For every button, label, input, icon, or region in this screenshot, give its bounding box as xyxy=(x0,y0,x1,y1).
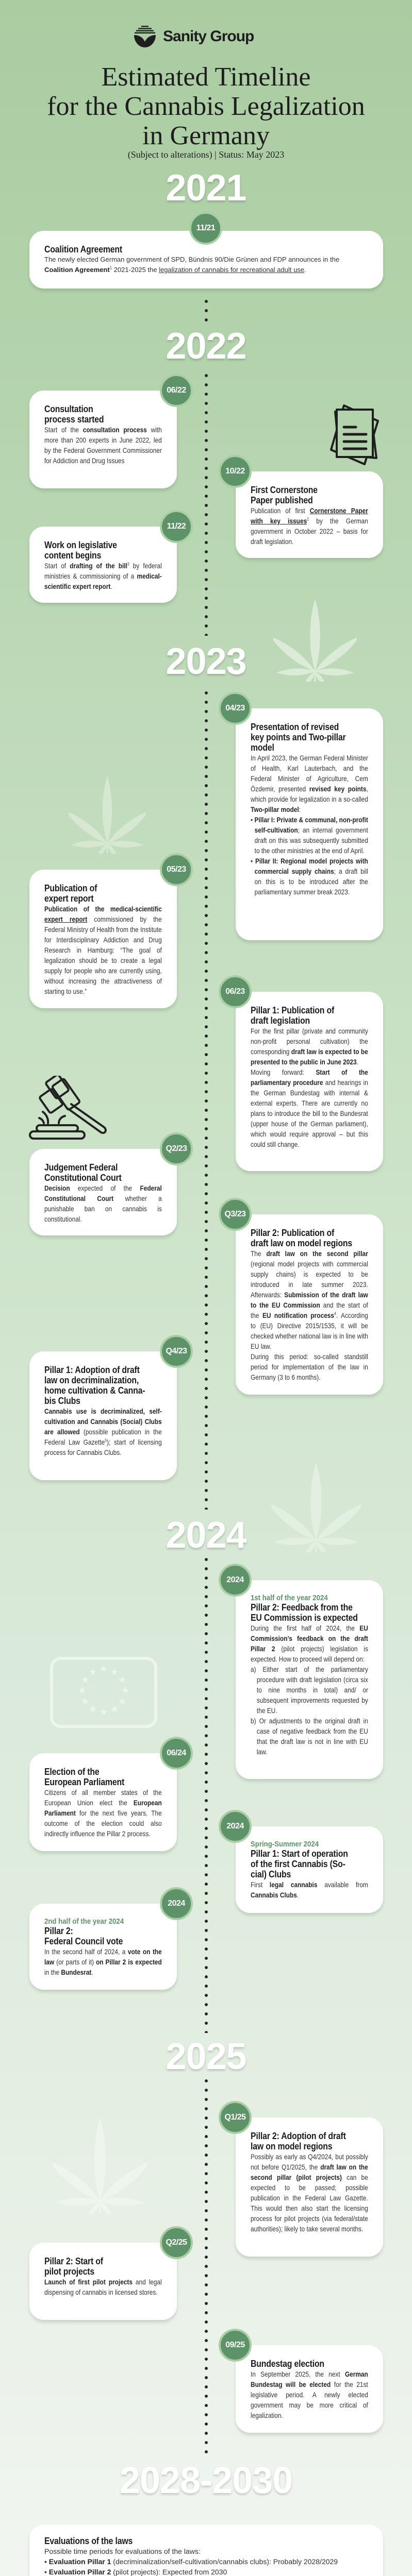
date: 05/23 xyxy=(160,853,193,886)
date: 2024 (1st half): 2024 xyxy=(226,1575,244,1584)
card: EU commission feedback: a) Either start of the parliamentary procedure with draft legislation (circa six to nine months in total) and/ or subsequent improvements requested by the EU. xyxy=(251,1665,368,1715)
card: pilot projects start: Launch of first pilot projects and legal dispensing of cannabis in licensed stores. xyxy=(44,2278,162,2296)
card: coalition agreement: The newly elected German government of SPD, Bündnis 90/Die Grünen and FDP announces in the Coalition Agreement1 2021-2025 the legalization of cannabis for recreational adult use. xyxy=(44,256,339,274)
date: 11/21: 11/21 xyxy=(196,224,215,232)
card: first cannabis clubs: First legal cannabis available from Cannabis Clubs. xyxy=(251,1880,368,1899)
card: pillar 1 adoption: Pillar 1: Adoption of draft xyxy=(44,1365,140,1375)
card: consultation process: process started xyxy=(44,414,104,425)
date: 2024 (spring-summer) xyxy=(219,1810,252,1843)
title xyxy=(47,62,365,150)
date: 09/25 xyxy=(219,2329,252,2362)
title: for the Cannabis Legalization xyxy=(47,92,365,121)
year: 2024: 2024 xyxy=(166,1515,246,1556)
year: 2028-2030: 2028-2030 xyxy=(120,2460,292,2501)
date: 06/23: 06/23 xyxy=(225,987,245,996)
date: 2024 (2nd half): 2024 xyxy=(168,1899,185,1908)
card: first cannabis clubs: Pillar 1: Start of operation xyxy=(251,1849,348,1859)
date: 10/22 xyxy=(219,455,252,488)
card: pilot projects start: pilot projects xyxy=(44,2266,94,2277)
card: pillar 2 model regions draft: The draft law on the second pillar (regional model projects with commercial supply chains) is expected to be introduced in late summer 2023. Afterwards: Submission of the draft law to the EU Commission and the start of the EU notification process4. According to (EU) Directive 2015/1535, it will be checked whether national law is in line with EU law. xyxy=(251,1249,368,1350)
date: Q2/25 xyxy=(160,2226,193,2259)
card: revised key points: key points and Two-pillar xyxy=(251,732,346,742)
card: evaluations xyxy=(29,2524,383,2576)
card: first cannabis clubs xyxy=(236,1826,383,1913)
date: Q2/25: Q2/25 xyxy=(166,2238,187,2247)
icon: EU flag: ★ xyxy=(89,1667,97,1677)
subtitle: (Subject to alterations) | Status: May 2023 xyxy=(128,149,284,160)
card: evaluations: • Evaluation Pillar 1 (decriminalization/self-cultivation/cannabis clubs): Probably 2028/2029 xyxy=(44,2557,338,2566)
date: 06/22: 06/22 xyxy=(167,386,186,395)
card: pillar 1 adoption: law on decriminalization, xyxy=(44,1375,139,1385)
card: revised key points: In April 2023, the German Federal Minister of Health, Karl Lauterbach, and the Federal Minister of Agriculture, Cem Özdemir, presented revised key points, which provide for legalization in a so-called Two-pillar model: xyxy=(251,754,368,814)
card: first cannabis clubs: Spring-Summer 2024 xyxy=(251,1840,319,1849)
card: revised key points xyxy=(236,708,383,940)
card: EU commission feedback: EU Commission is expected xyxy=(251,1613,358,1623)
card: pilot projects start: Pillar 2: Start of xyxy=(44,2256,103,2266)
title: Estimated Timeline xyxy=(102,62,310,92)
card: expert report xyxy=(29,870,177,1008)
icon: EU flag: ★ xyxy=(81,1696,89,1707)
date: 2024 (2nd half) xyxy=(160,1887,193,1920)
icon: cannabis leaf left xyxy=(69,776,146,854)
card: european parliament election: Citizens of all member states of the European Union elect the European Parliament for the next five years. The outcome of the election could also indirectly influence the Pillar 2 process. xyxy=(44,1788,162,1838)
card: federal council vote: In the second half of 2024, a vote on the law (or parts of it) on Pillar 2 is expected in the Bundesrat. xyxy=(44,1947,162,1976)
date: 11/22: 11/22 xyxy=(167,522,186,531)
card: pillar 1 adoption: bis Clubs xyxy=(44,1396,80,1406)
card: pillar 2 model regions draft: During this period: so-called standstill period for implementation of the law in Germany (3 to 6 months). xyxy=(251,1352,368,1381)
card: constitutional court: Constitutional Court xyxy=(44,1173,122,1183)
card: work on legislative content: Work on legislative xyxy=(44,540,117,550)
card: pillar 1 adoption: home cultivation & Canna- xyxy=(44,1385,145,1396)
date: Q3/23: Q3/23 xyxy=(224,1210,246,1218)
card: expert report: Publication of xyxy=(44,883,97,893)
card: first cornerstone paper: First Cornerstone xyxy=(251,485,318,495)
card: bundestag election: In September 2025, the next German Bundestag will be elected for the 21st legislative period. A newly elected government may be more critical of legalization. xyxy=(251,2370,368,2419)
icon: EU flag: ★ xyxy=(110,1704,119,1715)
card: pilot projects start xyxy=(29,2243,177,2320)
year: 2021: 2021 xyxy=(166,167,246,209)
card: federal council vote: Pillar 2: xyxy=(44,1926,73,1936)
date: 05/23: 05/23 xyxy=(167,865,186,874)
card: pillar 1 adoption xyxy=(29,1351,177,1480)
year: 2022: 2022 xyxy=(166,326,246,367)
date: Q1/25 xyxy=(219,2101,252,2134)
icon: gavel xyxy=(29,1076,107,1140)
date: 04/23: 04/23 xyxy=(225,704,245,713)
card: consultation process: Consultation xyxy=(44,404,93,414)
card: work on legislative content xyxy=(29,527,177,603)
card: european parliament election: Election of the xyxy=(44,1767,99,1777)
card: first cornerstone paper: Publication of first Cornerstone Paper with key issues2 by the German government in October 2022 – basis for draft legislation. xyxy=(251,506,368,546)
date: 06/23 xyxy=(219,975,252,1008)
card: pillar 1 draft legislation: Moving forward: Start of the parliamentary procedure and hearings in the German Bundestag with internal & external experts. There are currently no plans to introduce the bill to the Bundesrat (upper house of the German parliament), which would require approval – but this could still change. xyxy=(251,1068,368,1148)
card: revised key points: • Pillar I: Private & communal, non-profit self-cultivation; an internal government draft on this was subsequently submitted to the other ministries at the end of April. xyxy=(251,816,368,855)
card: first cannabis clubs: of the first Cannabis (So- xyxy=(251,1859,345,1869)
icon: cannabis leaf 2024 xyxy=(271,1463,361,1552)
card: pillar 2 adoption: law on model regions xyxy=(251,2141,332,2151)
card: consultation process: Start of the consultation process with more than 200 experts in June 2022, led by the Federal Government Commissioner for Addiction and Drug Issues xyxy=(44,426,162,465)
year: 2025: 2025 xyxy=(166,2036,246,2077)
icon: cannabis leaf 2025 xyxy=(53,2119,147,2191)
icon: EU flag: ★ xyxy=(110,1667,119,1677)
card: pillar 2 model regions draft: draft law on model regions xyxy=(251,1238,352,1248)
card: pillar 1 adoption: Cannabis use is decriminalized, self-cultivation and Cannabis (Social) Clubs are allowed (possible publication in the Federal Law Gazette5); start of licensing process for Cannabis Clubs. xyxy=(44,1407,162,1456)
date: 09/25: 09/25 xyxy=(225,2341,245,2349)
card: coalition agreement: Coalition Agreement xyxy=(44,244,122,255)
card: first cannabis clubs: cial) Clubs xyxy=(251,1869,291,1879)
card: pillar 2 model regions draft: Pillar 2: Publication of xyxy=(251,1228,334,1238)
icon: EU flag: ★ xyxy=(89,1704,97,1715)
icon: EU flag: ★ xyxy=(78,1685,86,1696)
card: evaluations: Evaluations of the laws xyxy=(44,2536,133,2546)
card: consultation process xyxy=(29,391,177,488)
card: coalition agreement xyxy=(29,231,383,289)
header logo xyxy=(134,26,254,47)
card: european parliament election xyxy=(29,1753,177,1851)
card: pillar 1 draft legislation: draft legislation xyxy=(251,1015,310,1026)
card: work on legislative content: content begins xyxy=(44,550,101,561)
card: bundestag election xyxy=(236,2345,383,2433)
icon: documents xyxy=(330,404,379,465)
card: revised key points: • Pillar II: Regional model projects with commercial supply chains; a draft bill on this is to be introduced after the parliamentary summer break 2023. xyxy=(251,857,368,896)
date: 2024 (spring-summer): 2024 xyxy=(226,1822,244,1831)
card: evaluations: Possible time periods for evaluations of the laws: xyxy=(44,2547,201,2555)
icon: EU flag: ★ xyxy=(81,1674,89,1685)
card: first cornerstone paper: Paper published xyxy=(251,495,313,505)
card: pillar 1 draft legislation: For the first pillar (private and community non-profit personal cultivation) the corresponding draft law is expected to be presented to the public in June 2023. xyxy=(251,1027,368,1066)
card: pillar 2 adoption xyxy=(236,2117,383,2257)
card: first cornerstone paper xyxy=(236,471,383,558)
card: federal council vote: 2nd half of the year 2024 xyxy=(44,1917,124,1926)
card: constitutional court: Judgement Federal xyxy=(44,1162,118,1173)
date: Q4/23: Q4/23 xyxy=(166,1347,187,1355)
date: 04/23 xyxy=(219,692,252,725)
date: Q3/23 xyxy=(219,1198,252,1231)
date: 06/24 xyxy=(160,1737,193,1770)
card: pillar 2 adoption: Pillar 2: Adoption of draft xyxy=(251,2131,346,2141)
card: revised key points: model xyxy=(251,742,274,753)
card: pillar 2 model regions draft xyxy=(236,1214,383,1395)
card: pillar 2 adoption: Possibly as early as Q4/2024, but possibly not before Q1/2025, the draft law on the second pillar (pilot projects) can be expected to be passed; possible publication in the Federal Law Gazette. This would then also start the licensing process for pilot projects (via federal/state authorities); likely to take several months. xyxy=(251,2153,368,2233)
date: Q2/23 xyxy=(160,1132,193,1165)
icon: EU flag: ★ xyxy=(118,1674,126,1685)
icon: EU flag xyxy=(50,1657,157,1728)
card: EU commission feedback: Pillar 2: Feedback from the xyxy=(251,1602,353,1613)
card: european parliament election: European Parliament xyxy=(44,1777,124,1787)
card: work on legislative content: Start of drafting of the bill3 by federal ministries & commissioning of a medical-scientific expert report. xyxy=(44,562,162,590)
date: 2024 (1st half) xyxy=(219,1564,252,1597)
icon: cannabis leaf 2023 xyxy=(273,600,357,682)
icon: EU flag: ★ xyxy=(100,1707,108,1718)
title: in Germany xyxy=(142,121,270,150)
card: evaluations: • Evaluation Pillar 2 (pilot projects): Expected from 2030 xyxy=(44,2568,227,2576)
icon: EU flag: ★ xyxy=(100,1664,108,1674)
icon: sanity group logo mark xyxy=(134,26,156,47)
card: EU commission feedback: During the first half of 2024, the EU Commission’s feedback on the draft Pillar 2 (pilot projects) legislation is expected. How to proceed will depend on: xyxy=(251,1624,368,1663)
date: Q4/23 xyxy=(160,1335,193,1368)
date: 06/22 xyxy=(160,374,193,407)
logo text: Sanity Group xyxy=(163,28,254,45)
card: federal council vote: Federal Council vote xyxy=(44,1936,123,1946)
date: 10/22: 10/22 xyxy=(225,467,245,476)
card: revised key points: Presentation of revised xyxy=(251,722,339,732)
card: federal council vote xyxy=(29,1904,177,1990)
date: 11/21 xyxy=(189,212,222,245)
card: constitutional court: Decision expected of the Federal Constitutional Court whether a punishable ban on cannabis is constitutional. xyxy=(44,1184,162,1223)
date: Q1/25: Q1/25 xyxy=(224,2113,246,2122)
card: EU commission feedback: 1st half of the year 2024 xyxy=(251,1594,328,1602)
card: bundestag election: Bundestag election xyxy=(251,2359,324,2369)
date: 11/22 xyxy=(160,510,193,543)
card: EU commission feedback xyxy=(236,1580,383,1779)
card: EU commission feedback: b) Or adjustments to the original draft in case of negative feedback from the EU that the draft law is not in line with EU law. xyxy=(251,1717,368,1756)
card: constitutional court xyxy=(29,1149,177,1235)
icon: EU flag: ★ xyxy=(121,1685,129,1696)
year: 2023: 2023 xyxy=(166,641,246,682)
card: pillar 1 draft legislation: Pillar 1: Publication of xyxy=(251,1005,334,1015)
card: expert report: expert report xyxy=(44,893,93,904)
icon: EU flag: ★ xyxy=(118,1696,126,1707)
date: Q2/23: Q2/23 xyxy=(166,1144,187,1153)
date: 06/24: 06/24 xyxy=(167,1749,186,1757)
card: expert report: Publication of the medical-scientific expert report commissioned by the Federal Ministry of Health from the Institute for Interdisciplinary Addiction and Drug Research in Hamburg: “The goal of legalization should be to create a legal supply for people who are currently using, without increasing the attractiveness of starting to use.” xyxy=(44,905,162,995)
card: pillar 1 draft legislation xyxy=(236,992,383,1171)
